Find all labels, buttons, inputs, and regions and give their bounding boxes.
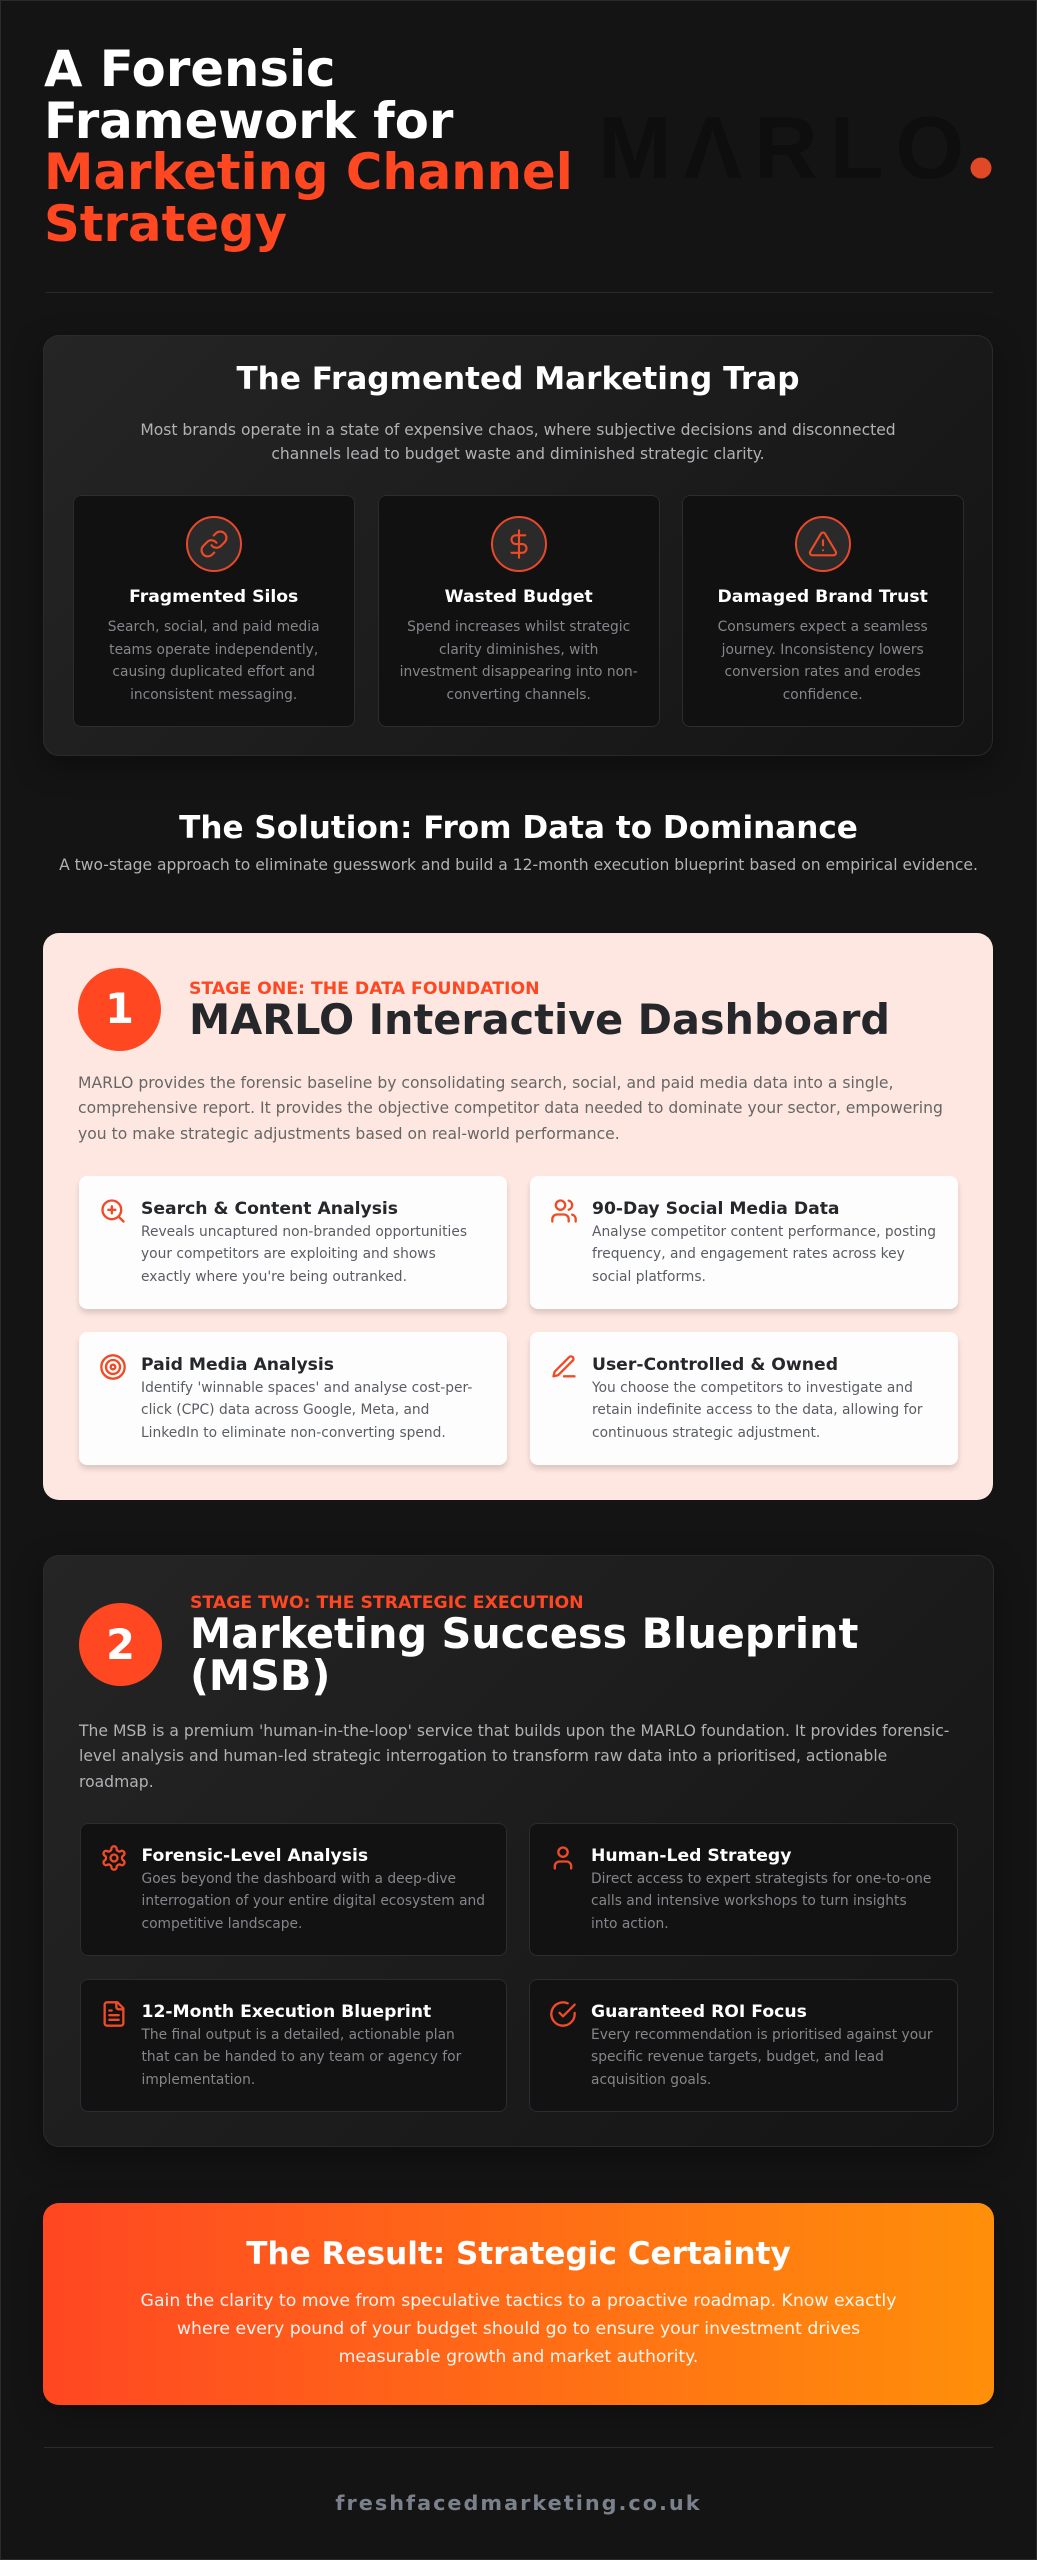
card text: competitive landscape. [142,1916,302,1932]
card text [141,1380,472,1441]
card title: Paid Media Analysis [141,1355,334,1375]
panel: stage one [43,933,993,1500]
card title: 12-Month Execution Blueprint [142,2002,431,2022]
icon: person [554,1846,572,1870]
card text [718,619,928,703]
heading: the solution: The Solution: From Data to Dominance [179,810,858,846]
card: 12-month execution blueprint [80,1979,507,2112]
card text: that can be handed to any team or agency for [142,2049,461,2065]
stage description [78,1722,949,1791]
card text: Identify 'winnable spaces' and analyse cost-per- [141,1380,472,1396]
card text: LinkedIn to eliminate non-converting spend. [141,1425,446,1441]
icon: document [104,2001,124,2027]
card text: causing duplicated effort and [112,664,315,680]
icon: search [101,1199,125,1223]
card text: calls and intensive workshops to turn insights [591,1893,907,1909]
stage title [190,1610,858,1700]
card: user-controlled and owned [530,1332,958,1465]
stage label: STAGE TWO: THE STRATEGIC EXECUTION [190,1593,584,1613]
panel: fragmented marketing trap [43,335,993,756]
panel: the result [43,2203,994,2405]
card: wasted budget [378,495,660,727]
title: Framework for [44,92,453,150]
card: forensic-level analysis [80,1823,507,1956]
card text: interrogation of your entire digital ecosystem and [142,1893,485,1909]
step number 1: 1 [105,985,134,1033]
card text: frequency, and engagement rates across key [592,1246,905,1262]
card text: Every recommendation is prioritised against your [591,2027,933,2043]
card: damaged brand trust [682,495,964,727]
stage title: Marketing Success Blueprint [190,1610,858,1658]
card text: acquisition goals. [591,2072,711,2088]
card title: 90-Day Social Media Data [592,1199,840,1219]
footer: website: freshfacedmarketing.co.uk [335,2491,702,2515]
stage description: roadmap. [79,1773,154,1791]
card text: conversion rates and erodes [724,664,921,680]
icon: users [551,1199,577,1223]
step number 2 [79,1603,162,1686]
card text [142,1871,485,1932]
title: A Forensic [44,40,335,98]
card text: your competitors are exploiting and shows [141,1246,436,1262]
card title: User-Controlled & Owned [592,1355,838,1375]
card text: Search, social, and paid media [108,619,320,635]
card title: Forensic-Level Analysis [142,1846,368,1866]
title: Strategy [44,195,287,253]
card text: Analyse competitor content performance, posting [592,1224,936,1240]
intro text: channels lead to budget waste and diminished strategic clarity. [271,445,765,463]
title [44,40,573,253]
card: guaranteed ROI focus [529,1979,958,2112]
card text [591,1871,931,1932]
card text: retain indefinite access to the data, allowing for [592,1402,923,1418]
step number 1 [78,968,161,1050]
stage description: comprehensive report. It provides the objective competitor data needed to dominate your sector, empowering [78,1099,943,1117]
card title: Search & Content Analysis [141,1199,398,1219]
card text: specific revenue targets, budget, and lead [591,2049,884,2065]
result text: measurable growth and market authority. [339,2347,698,2367]
card text: inconsistent messaging. [130,687,297,703]
icon: gear [102,1845,126,1871]
card title: Guaranteed ROI Focus [591,2002,807,2022]
card title: Wasted Budget [445,587,593,607]
card text [141,2027,462,2088]
result text: where every pound of your budget should go to ensure your investment drives [177,2319,860,2339]
card text: Goes beyond the dashboard with a deep-dive [142,1871,456,1887]
icon: dollar [491,516,547,572]
stage description: MARLO provides the forensic baseline by consolidating search, social, and paid media data into a single, [78,1074,893,1092]
stage description: you to make strategic adjustments based on real-world performance. [78,1125,620,1143]
card text [108,619,320,703]
card text: teams operate independently, [109,642,318,658]
stage title: (MSB) [190,1652,330,1700]
stage label: STAGE ONE: THE DATA FOUNDATION [189,979,540,999]
card text: You choose the competitors to investigate and [592,1380,913,1396]
stage title: MARLO Interactive Dashboard [189,996,890,1044]
icon: check circle [550,2001,576,2027]
icon: target [100,1354,126,1380]
card text [591,2027,933,2088]
stage description: The MSB is a premium 'human-in-the-loop' service that builds upon the MARLO foundation. It provides forensic- [79,1722,949,1740]
intro text [140,421,896,463]
card text: Consumers expect a seamless [718,619,928,635]
intro text: Most brands operate in a state of expensive chaos, where subjective decisions and disconnected [140,421,896,439]
card text: exactly where you're being outranked. [141,1269,407,1285]
solution subtitle: A two-stage approach to eliminate guesswork and build a 12-month execution blueprint based on empirical evidence. [59,856,978,874]
icon: pen [552,1355,576,1378]
card text [592,1224,936,1285]
heading: The Fragmented Marketing Trap [236,361,800,397]
icon: link [186,516,242,572]
card: human-led strategy [529,1823,958,1956]
card text: investment disappearing into non- [400,664,638,680]
card text: Direct access to expert strategists for one-to-one [591,1871,931,1887]
card text: The final output is a detailed, actionable plan [142,2027,455,2043]
card text [592,1380,923,1441]
card: 90-day social media data [530,1176,958,1309]
step number 2: 2 [106,1620,135,1668]
card text: Spend increases whilst strategic [407,619,630,635]
card text: journey. Inconsistency lowers [722,642,924,658]
result heading: The Result: Strategic Certainty [246,2236,791,2272]
card title: Human-Led Strategy [591,1846,791,1866]
card text: converting channels. [446,687,591,703]
icon: warning [795,516,851,572]
card text: continuous strategic adjustment. [592,1425,820,1441]
card text: social platforms. [592,1269,706,1285]
card text: implementation. [142,2072,255,2088]
card text: click (CPC) data across Google, Meta, and [141,1402,429,1418]
panel: stage two [43,1555,994,2147]
card text: Reveals uncaptured non-branded opportunities [141,1224,467,1240]
result text: Gain the clarity to move from speculative tactics to a proactive roadmap. Know exactly [141,2291,896,2311]
result text [141,2291,896,2367]
card: fragmented silos [73,495,355,727]
card title: Damaged Brand Trust [718,587,928,607]
stage description [78,1074,943,1143]
card text: clarity diminishes, with [439,642,598,658]
title: Marketing Channel [44,143,573,201]
card: search and content analysis [79,1176,507,1309]
stage description: level analysis and human-led strategic interrogation to transform raw data into a prioritised, actionable [79,1747,887,1765]
card text [400,619,638,703]
card title: Fragmented Silos [129,587,298,607]
card: paid media analysis [79,1332,507,1465]
card text [141,1224,467,1285]
card text: confidence. [783,687,863,703]
card text: into action. [591,1916,669,1932]
